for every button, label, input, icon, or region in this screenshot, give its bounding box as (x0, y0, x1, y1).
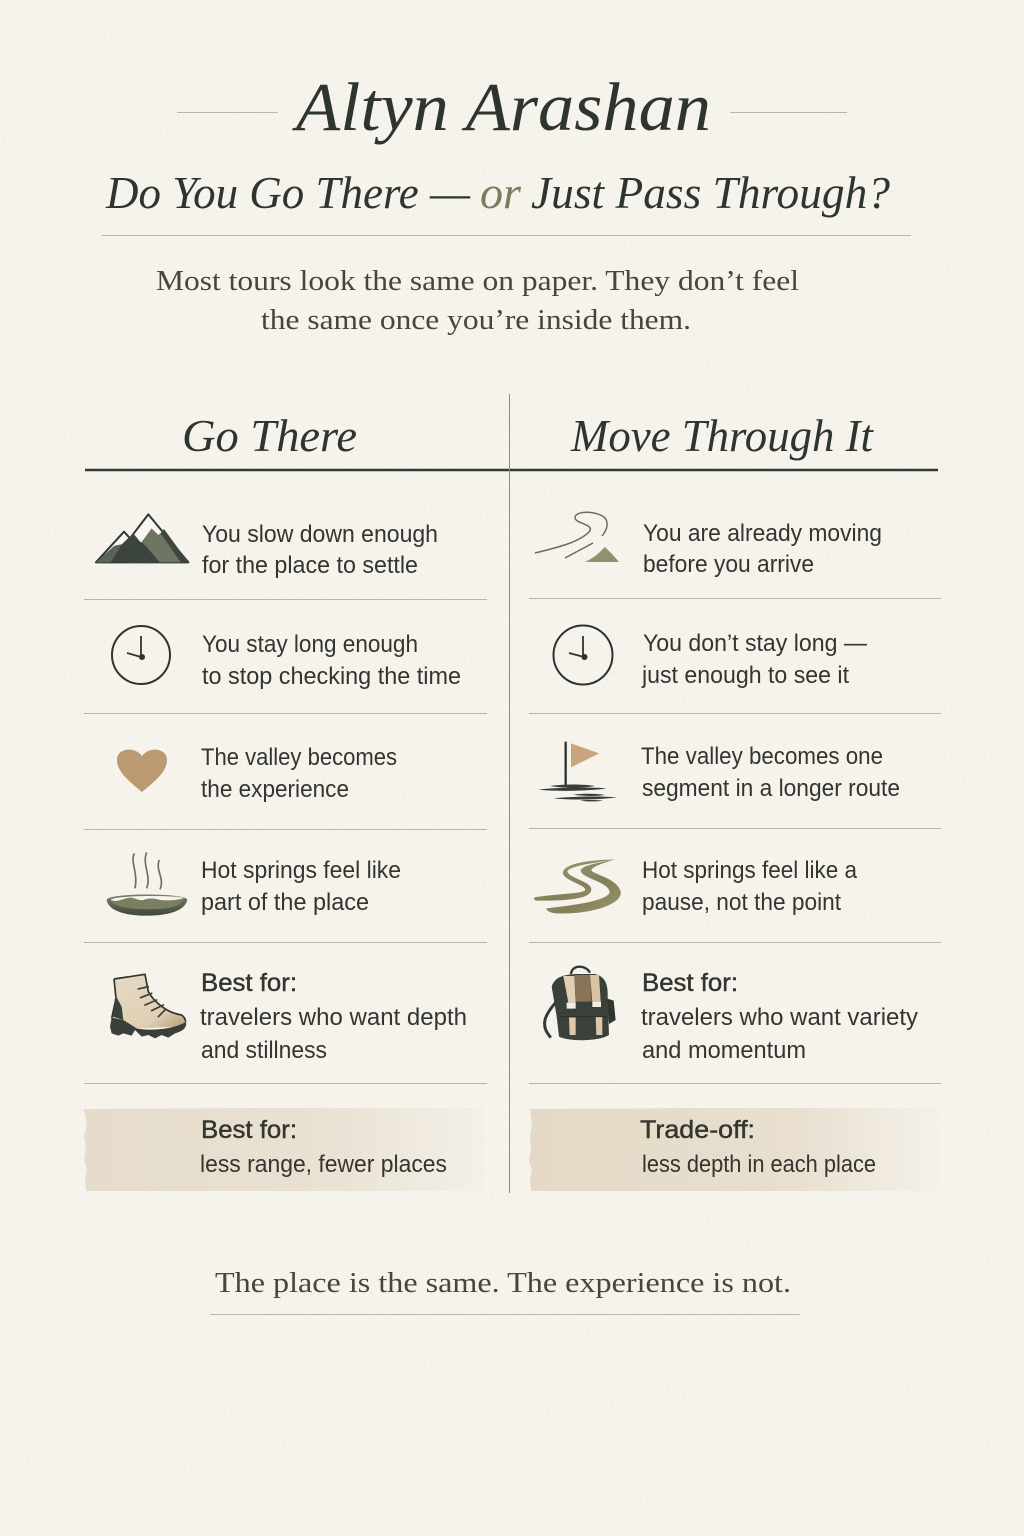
text: best for depth: Best for: (201, 969, 297, 997)
text: hot springs: Hot springs feel like (201, 857, 401, 884)
icon: winding river (534, 859, 621, 914)
text: stay long (202, 631, 461, 690)
callout: left trade-off band (84, 1108, 484, 1191)
text: pause: Hot springs feel like a (642, 857, 858, 884)
intro text: Most tours look the same on paper. They don’t feel (156, 265, 799, 297)
callout: right trade-off band: less depth in each place (642, 1151, 876, 1178)
icon: backpack (545, 967, 616, 1040)
text: one segment: segment in a longer route (642, 775, 900, 802)
text: hot springs (201, 857, 401, 916)
text: valley becomes: The valley becomes (201, 744, 397, 771)
text: slow down (202, 521, 438, 579)
text: best for variety: travelers who want variety (641, 1004, 918, 1031)
subtitle (105, 167, 890, 218)
text: stay long: You stay long enough (202, 631, 418, 658)
icon: mountains (96, 514, 188, 562)
closing statement: The place is the same. The experience is not. (215, 1267, 791, 1299)
icon: hot spring bowl (107, 852, 187, 916)
title: Altyn Arashan (292, 69, 711, 145)
text: slow down: You slow down enough (202, 521, 438, 548)
callout: right trade-off band (529, 1108, 940, 1191)
text: best for depth (200, 969, 467, 1064)
text: slow down: for the place to settle (202, 552, 418, 579)
callout: right trade-off band: Trade-off: (640, 1116, 755, 1144)
text: hot springs: part of the place (201, 889, 369, 916)
text: already moving: You are already moving (643, 520, 882, 547)
icon: winding path and hill (535, 512, 619, 562)
icon: clock (112, 626, 170, 684)
text: pause (642, 857, 858, 916)
text: best for depth: travelers who want depth (200, 1004, 467, 1031)
text: best for depth: and stillness (201, 1037, 327, 1064)
text: best for variety: and momentum (642, 1037, 806, 1064)
text: dont stay long: just enough to see it (641, 662, 849, 689)
text: dont stay long (641, 630, 867, 689)
text: one segment (641, 743, 900, 802)
text: already moving: before you arrive (643, 551, 814, 578)
row dividers (84, 598, 941, 1084)
text: pause: pause, not the point (642, 889, 841, 916)
text: dont stay long: You don’t stay long — (643, 630, 867, 657)
intro text (156, 265, 799, 336)
column heading: Go There: Go There (182, 410, 357, 461)
icon: clock (554, 626, 612, 684)
panel: Go There rows (84, 514, 484, 1191)
column heading: Move Through It: Move Through It (570, 410, 874, 461)
subtitle: or (480, 167, 522, 218)
text: stay long: to stop checking the time (202, 663, 461, 690)
intro text: the same once you’re inside them. (261, 304, 691, 336)
text: already moving (643, 520, 882, 578)
text: valley becomes: the experience (201, 776, 349, 803)
callout: left trade-off band: Best for: (201, 1116, 297, 1144)
subtitle: Do You Go There — (105, 167, 471, 218)
panel: Move Through It rows (529, 512, 940, 1191)
icon: hiking boot (110, 974, 186, 1038)
subtitle: Just Pass Through? (531, 167, 890, 218)
callout: left trade-off band: less range, fewer places (200, 1151, 447, 1178)
text: valley becomes (201, 744, 397, 803)
icon: heart (117, 750, 167, 792)
text: best for variety (641, 969, 918, 1064)
text: best for variety: Best for: (642, 969, 738, 997)
text: one segment: The valley becomes one (641, 743, 883, 770)
icon: flag on route (538, 742, 617, 801)
